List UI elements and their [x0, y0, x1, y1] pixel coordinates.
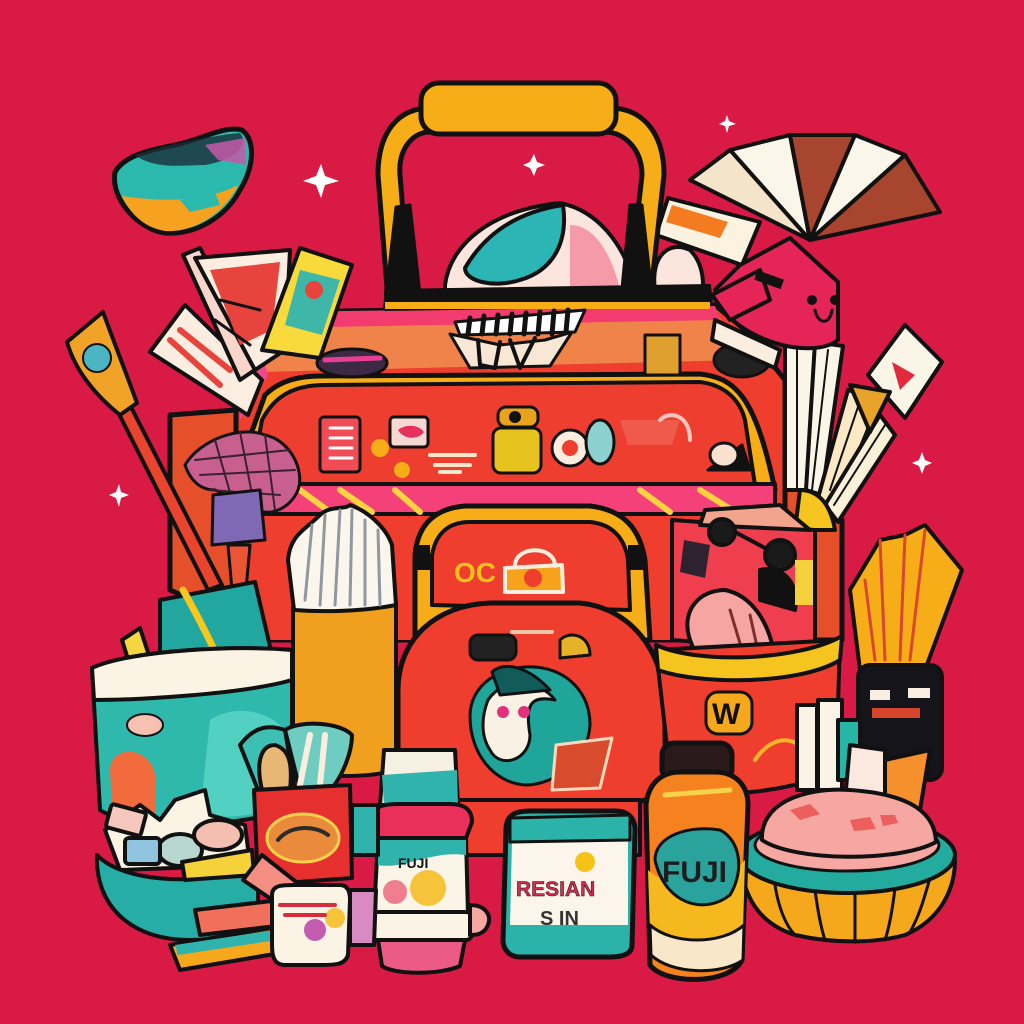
food bowl with packets [739, 700, 955, 942]
fan: left cards [150, 248, 352, 415]
box label text: RESIAN [516, 878, 595, 901]
main bag body [170, 305, 842, 640]
orange bucket with W logo [656, 636, 842, 794]
brush: wooden oar [67, 312, 222, 590]
backpack label text: OC [454, 557, 496, 588]
bottle label text: FUJI [662, 856, 727, 889]
white brush in yellow cup [288, 505, 396, 776]
item inside bag: teal and pink helmet [445, 203, 703, 300]
teal box with white label [503, 811, 635, 957]
backpack mascot badge [470, 635, 612, 790]
orange vitamin bottle [646, 743, 748, 979]
teal basket with supplies [97, 790, 258, 940]
pink striped thermos [368, 750, 489, 973]
icon: floating pouch [114, 129, 252, 233]
thermos label text: FUJI [398, 855, 428, 871]
bottom left packets [170, 855, 376, 970]
small red tool cup with brush [240, 724, 378, 885]
bucket W letter: W [712, 698, 741, 731]
pink mascot item with bow [712, 238, 838, 368]
teal cup with cloth [92, 582, 292, 824]
main bag handle [378, 83, 664, 300]
backpack front [398, 506, 665, 855]
flower duster [185, 432, 300, 590]
right white fan of sticks [785, 325, 942, 530]
icon: sparkles [109, 115, 932, 507]
bag straps [382, 205, 656, 330]
bag top bar and striped zipper [317, 285, 770, 377]
far right brush [850, 525, 962, 780]
bag stickers row [320, 407, 750, 478]
fan: top right [656, 135, 940, 265]
sunglasses and cards sleeve [672, 505, 815, 665]
box small text: S IN [540, 908, 579, 930]
